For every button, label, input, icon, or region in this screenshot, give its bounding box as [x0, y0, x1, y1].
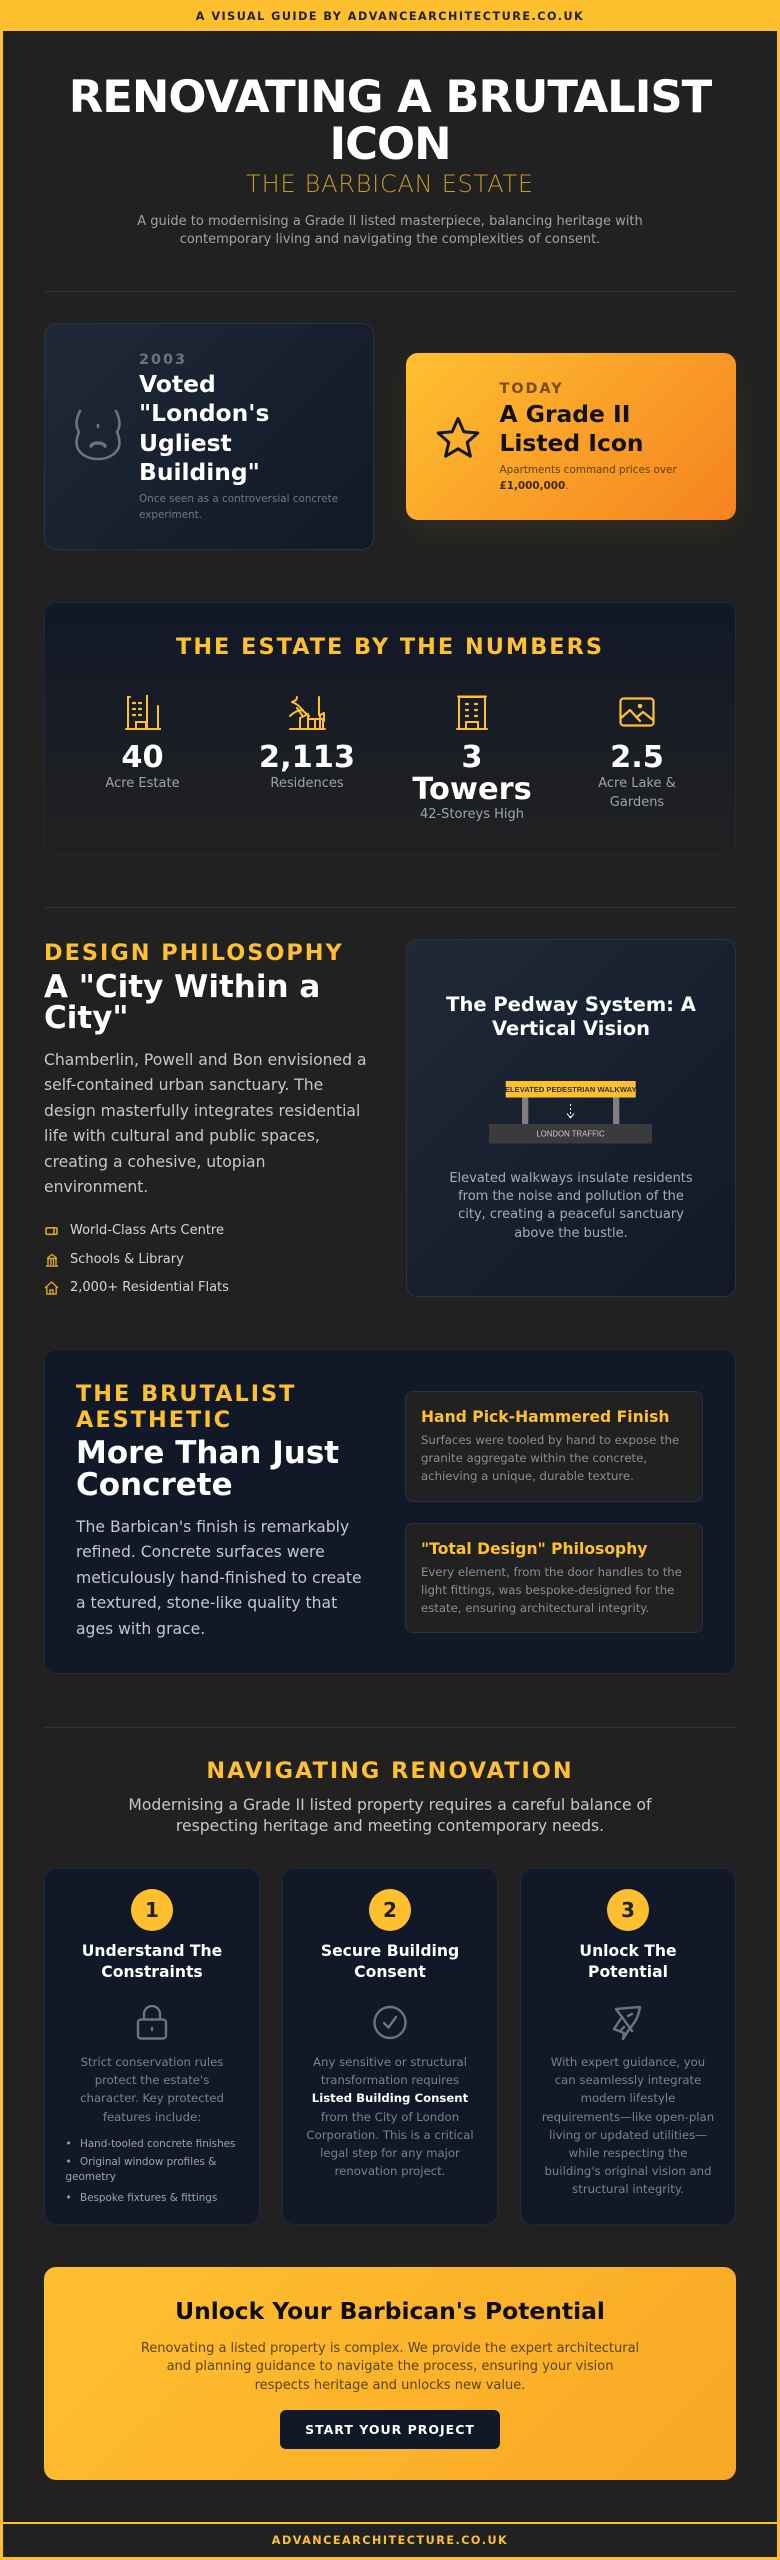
card: 2003 — [44, 323, 374, 550]
text: granite aggregate within the concrete, — [421, 1451, 647, 1465]
title: Unlock The — [579, 1942, 677, 1960]
text: World-Class Arts Centre — [70, 1223, 224, 1238]
card: hand finish — [405, 1391, 703, 1502]
list — [66, 2138, 235, 2204]
text: from the City of London — [321, 2110, 459, 2124]
text: while respecting the — [569, 2146, 687, 2160]
heading: voted ugliest: "London's — [139, 399, 269, 427]
diagram: pedway — [489, 1081, 652, 1144]
paragraph: a textured, stone-like quality that — [76, 1594, 337, 1612]
text: renovation project. — [335, 2164, 445, 2178]
number — [607, 1889, 649, 1931]
paragraph: creating a cohesive, utopian — [44, 1153, 265, 1171]
paragraph: environment. — [44, 1178, 148, 1196]
text: building's original vision and — [544, 2164, 712, 2178]
text — [282, 2053, 498, 2180]
number: 40 — [121, 740, 164, 775]
text: achieving a unique, durable texture. — [421, 1469, 634, 1483]
icon: house — [44, 1281, 58, 1295]
list: arts centre — [45, 1223, 224, 1238]
heading: voted ugliest: Ugliest — [139, 429, 232, 457]
eyebrow: AESTHETIC — [76, 1406, 232, 1432]
paragraph: Chamberlin, Powell and Bon envisioned a — [44, 1051, 367, 1069]
description: city, creating a peaceful sanctuary — [458, 1207, 684, 1222]
number: 1 — [145, 1898, 159, 1922]
text: Schools & Library — [70, 1252, 184, 1266]
heading — [446, 993, 696, 1040]
heading: Unlock Your Barbican's Potential — [175, 2297, 605, 2325]
caption — [139, 493, 338, 521]
icon: library — [46, 1254, 58, 1267]
paragraph — [76, 1518, 362, 1638]
subheading: respecting heritage and meeting contemporary needs. — [176, 1816, 604, 1834]
diagram: pedway: ELEVATED PEDESTRIAN WALKWAY — [505, 1085, 636, 1094]
paragraph — [44, 2340, 736, 2395]
text: Any sensitive or structural — [313, 2055, 467, 2069]
number: 3 — [621, 1898, 635, 1922]
description: Elevated walkways insulate residents — [449, 1171, 693, 1186]
stat: towers — [412, 696, 532, 822]
label — [598, 776, 676, 810]
heading: City" — [44, 1000, 129, 1036]
call to action — [44, 2267, 736, 2480]
title: Hand Pick-Hammered Finish — [421, 1408, 669, 1426]
label: 2003: 2003 — [139, 352, 187, 368]
text — [80, 2055, 224, 2124]
paragraph: meticulously hand-finished to create — [76, 1569, 362, 1587]
heading: More Than Just — [76, 1435, 339, 1471]
heading: navigating: NAVIGATING RENOVATION — [206, 1758, 574, 1784]
title: Secure Building — [321, 1942, 459, 1960]
heading — [44, 968, 320, 1036]
label: Residences — [270, 776, 344, 791]
paragraph — [44, 1051, 367, 1196]
text: estate, ensuring architectural integrity. — [421, 1601, 649, 1615]
button — [280, 2410, 500, 2449]
paragraph: self-contained urban sanctuary. The — [44, 1076, 323, 1094]
step 3 — [520, 1868, 736, 2225]
eyebrow: THE BRUTALIST — [76, 1380, 296, 1406]
list: Original window profiles & — [80, 2156, 216, 2168]
icon: office — [125, 695, 161, 730]
heading — [76, 1435, 339, 1503]
paragraph: and planning guidance to navigate the process, ensuring your vision — [167, 2359, 613, 2374]
description: above the bustle. — [514, 1226, 628, 1241]
icon: ticket — [45, 1227, 58, 1236]
intro text — [137, 214, 643, 247]
list: Bespoke fixtures & fittings — [80, 2192, 217, 2204]
list: flats — [44, 1280, 229, 1295]
subheading — [128, 1796, 652, 1834]
number: 2 — [383, 1898, 397, 1922]
panel: estate numbers — [44, 602, 736, 855]
text: With expert guidance, you — [551, 2055, 705, 2069]
list: • — [66, 2192, 72, 2204]
paragraph: design masterfully integrates residential — [44, 1102, 360, 1120]
text: light fittings, was bespoke-designed for the — [421, 1583, 674, 1597]
list: • — [66, 2138, 72, 2150]
heading: Concrete — [76, 1467, 233, 1503]
heading: Vertical Vision — [492, 1017, 650, 1040]
icon: frowning face — [75, 410, 121, 460]
step 2 — [282, 1868, 498, 2225]
title: Constraints — [101, 1963, 203, 1981]
paragraph: The Barbican's finish is remarkably — [76, 1518, 349, 1536]
number: 2.5 — [610, 740, 664, 775]
text: can seamlessly integrate — [555, 2073, 701, 2087]
eyebrow: DESIGN PHILOSOPHY — [44, 940, 344, 966]
text: requirements—like open-plan — [542, 2110, 714, 2124]
panel: brutalist aesthetic — [44, 1349, 736, 1674]
title: RENOVATING A BRUTALIST — [69, 70, 711, 123]
description — [449, 1171, 693, 1241]
number: 3 — [461, 740, 483, 775]
heading: grade II: A Grade II — [500, 400, 630, 428]
top banner: A VISUAL GUIDE BY ADVANCEARCHITECTURE.CO.UK — [196, 10, 584, 23]
label: Gardens — [610, 794, 664, 810]
intro text: contemporary living and navigating the complexities of consent. — [180, 232, 600, 247]
button: START YOUR PROJECT — [305, 2422, 475, 2437]
text: Every element, from the door handles to the — [421, 1565, 682, 1579]
paragraph: refined. Concrete surfaces were — [76, 1543, 325, 1561]
number: Towers — [412, 772, 532, 807]
caption: Apartments command prices over — [500, 464, 677, 476]
text: protect the estate's — [95, 2073, 209, 2087]
number — [131, 1889, 173, 1931]
section: design philosophy — [44, 940, 367, 1295]
title — [69, 70, 712, 170]
eyebrow — [76, 1380, 296, 1432]
number — [412, 740, 532, 807]
caption: £1,000,000. — [500, 480, 569, 492]
list: geometry — [66, 2171, 116, 2183]
label: Acre Estate — [105, 776, 180, 791]
icon: rocket — [612, 2005, 642, 2041]
title: Understand The — [82, 1942, 222, 1960]
stat: lake — [598, 697, 676, 810]
text — [421, 1565, 682, 1615]
caption: experiment. — [139, 509, 202, 521]
icon: star — [436, 417, 480, 458]
label: 42-Storeys High — [420, 807, 524, 822]
caption — [500, 464, 677, 492]
heading: A "City Within a — [44, 968, 320, 1004]
title: ICON — [329, 117, 451, 170]
title: "Total Design" Philosophy — [421, 1540, 647, 1558]
heading: voted ugliest: Voted — [139, 370, 216, 398]
text: 2,000+ Residential Flats — [70, 1280, 229, 1295]
list: schools — [46, 1252, 184, 1267]
list: Hand-tooled concrete finishes — [80, 2138, 235, 2150]
title — [520, 1941, 736, 1983]
heading: The Pedway System: A — [446, 993, 696, 1016]
number — [369, 1889, 411, 1931]
heading: grade II — [500, 400, 644, 457]
icon: buildings — [289, 696, 326, 730]
stat: acres — [105, 695, 180, 791]
paragraph: respects heritage and unlocks new value. — [255, 2378, 525, 2393]
caption: Once seen as a controversial concrete — [139, 493, 338, 505]
list: • — [66, 2156, 72, 2168]
text: features include: — [103, 2110, 201, 2124]
paragraph: life with cultural and public spaces, — [44, 1127, 320, 1145]
text — [421, 1433, 679, 1483]
text: transformation requires — [321, 2073, 459, 2087]
footer — [3, 2522, 777, 2557]
heading: voted ugliest — [139, 370, 269, 486]
footer: ADVANCEARCHITECTURE.CO.UK — [272, 2534, 508, 2547]
paragraph: ages with grace. — [76, 1620, 205, 1638]
card: total design — [405, 1523, 703, 1633]
heading: voted ugliest: Building" — [139, 458, 260, 486]
number: 2,113 — [259, 740, 355, 775]
subtitle: THE BARBICAN ESTATE — [246, 170, 534, 198]
card: pedway — [406, 939, 736, 1297]
text: character. Key protected — [80, 2091, 224, 2105]
text: Listed Building Consent — [312, 2091, 468, 2105]
icon: check circle — [373, 2005, 407, 2040]
paragraph: Renovating a listed property is complex. We provide the expert architectural — [141, 2341, 639, 2356]
heading: THE ESTATE BY THE NUMBERS — [176, 634, 604, 660]
intro text: A guide to modernising a Grade II listed masterpiece, balancing heritage with — [137, 214, 643, 229]
title: Consent — [354, 1963, 426, 1981]
text: Surfaces were tooled by hand to expose the — [421, 1433, 679, 1447]
stat: residences — [259, 696, 355, 791]
text — [520, 2053, 736, 2199]
icon: lock — [136, 2005, 168, 2040]
top banner — [0, 0, 780, 31]
text: Strict conservation rules — [81, 2055, 223, 2069]
card: today — [406, 353, 736, 520]
title — [82, 1942, 222, 1981]
label: Acre Lake & — [598, 776, 676, 791]
text: Corporation. This is a critical — [306, 2128, 474, 2142]
text: modern lifestyle — [581, 2091, 675, 2105]
description: from the noise and pollution of the — [458, 1189, 684, 1204]
step 1 — [44, 1868, 260, 2225]
label: today: TODAY — [500, 381, 564, 397]
title — [282, 1941, 498, 1983]
text: structural integrity. — [572, 2182, 684, 2196]
subheading: Modernising a Grade II listed property requires a careful balance of — [128, 1796, 652, 1814]
heading: grade II: Listed Icon — [500, 429, 644, 457]
text: legal step for any major — [320, 2146, 460, 2160]
title: Potential — [588, 1963, 668, 1981]
diagram: pedway: LONDON TRAFFIC — [536, 1130, 605, 1138]
text: living or updated utilities— — [549, 2128, 707, 2142]
icon: picture — [619, 697, 655, 727]
icon: tower — [456, 696, 488, 730]
